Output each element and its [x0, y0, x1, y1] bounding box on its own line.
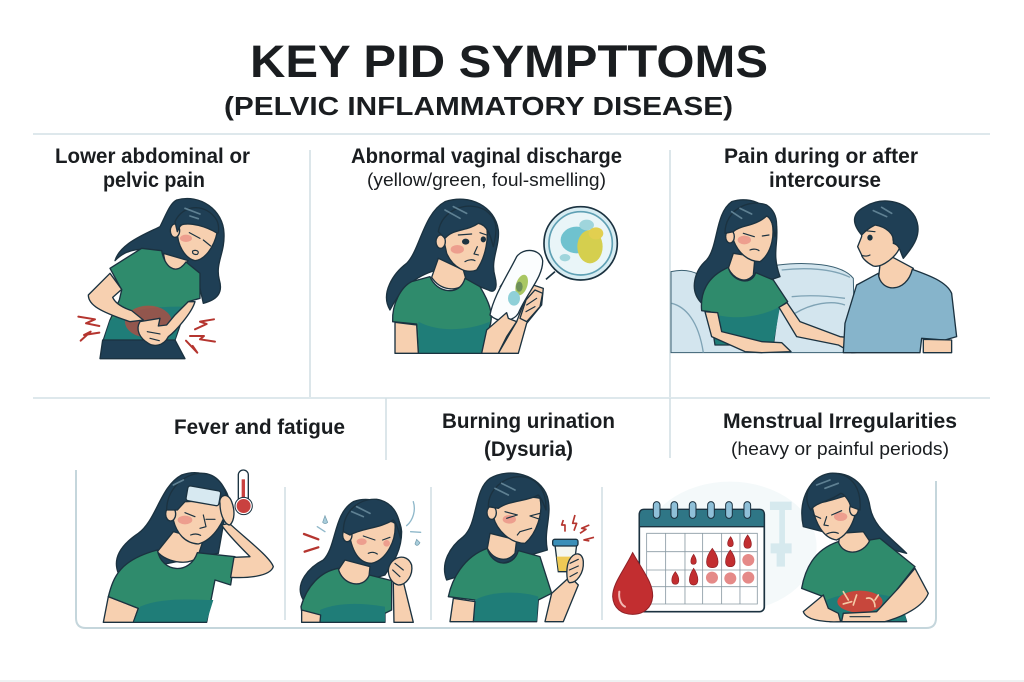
illustration: woman, urine cup, calendar [445, 473, 928, 622]
strip frame [76, 470, 936, 628]
illustration: woman inspecting pad [387, 199, 617, 353]
heading: abnormal discharge: Abnormal vaginal discharge [351, 145, 622, 168]
illustration: couple on bed [671, 200, 957, 353]
heading: pain during intercourse: Pain during or after [724, 145, 918, 168]
illustration: woman with fever [103, 470, 421, 622]
heading: lower abdominal pain: Lower abdominal or [55, 145, 250, 168]
heading: pain during intercourse [724, 145, 918, 192]
blood drop [613, 553, 653, 614]
second fatigue woman [300, 499, 402, 600]
panel: lower abdominal or pelvic pain [55, 145, 250, 359]
calendar [639, 482, 817, 612]
heading: fever and fatigue: Fever and fatigue [174, 416, 345, 439]
heading: menstrual irregularities: (heavy or painful periods) [731, 439, 949, 459]
title: KEY PID SYMPTTOMS [250, 36, 768, 87]
menstrual pain woman [802, 473, 907, 553]
heading: pain during intercourse: intercourse [769, 169, 881, 192]
heading: burning urination [442, 410, 615, 461]
heading: lower abdominal pain: pelvic pain [103, 169, 205, 192]
heading: lower abdominal pain [55, 145, 250, 192]
heading: abnormal discharge [351, 145, 622, 190]
illustration: woman clutching abdomen [78, 199, 224, 359]
panel: illustrated strip [76, 410, 957, 628]
panel: pain during or after intercourse [671, 145, 957, 353]
heading: burning urination: Burning urination [442, 410, 615, 433]
heading: menstrual irregularities: Menstrual Irregularities [723, 410, 957, 433]
heading: menstrual irregularities [723, 410, 957, 459]
panel: abnormal vaginal discharge [351, 145, 622, 353]
subtitle: (PELVIC INFLAMMATORY DISEASE) [224, 91, 733, 121]
heading: abnormal discharge: (yellow/green, foul-smelling) [367, 170, 606, 190]
heading: burning urination: (Dysuria) [484, 438, 573, 461]
